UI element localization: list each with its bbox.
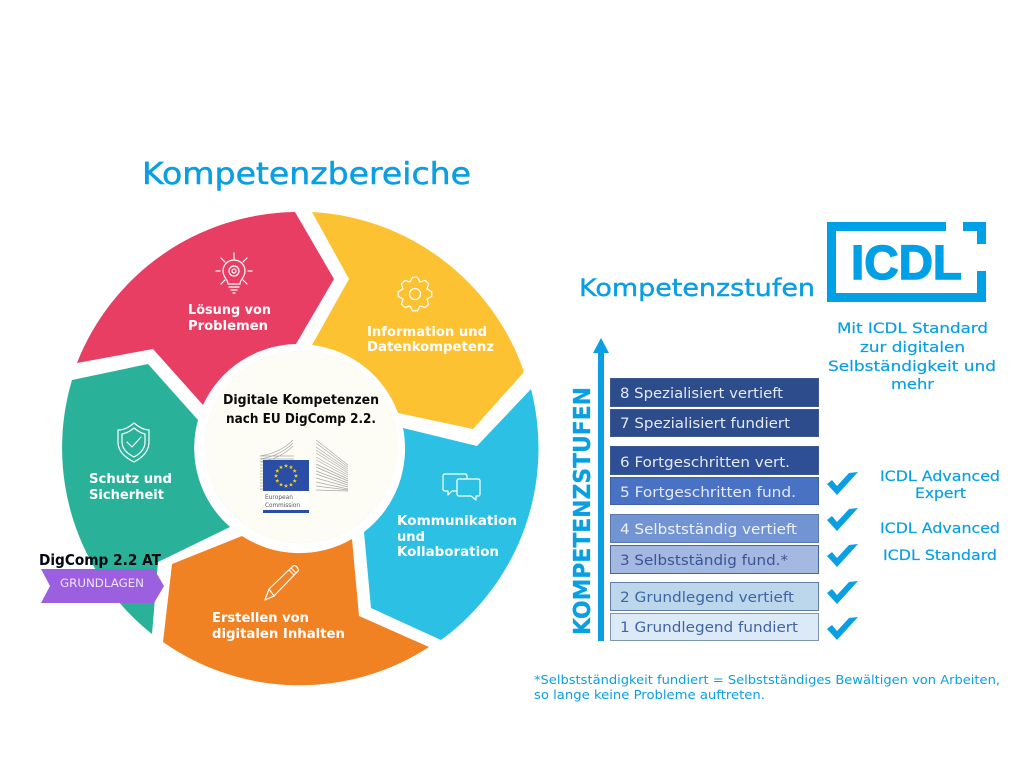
icon: speech bubbles	[443, 474, 480, 500]
badge: DigComp 2.2 AT Grundlagen: DigComp 2.2 AT	[39, 551, 161, 569]
ICDL logo: ICDL	[851, 237, 962, 290]
segment: Information und Datenkompetenz	[312, 212, 524, 429]
labels: ICDL certificates: Expert	[915, 486, 966, 502]
text: ICDL Standard note: mehr	[891, 377, 934, 393]
label: Erstellen von	[212, 611, 309, 626]
bar 6	[610, 446, 818, 474]
label: Lösung von	[188, 303, 271, 318]
bar 5	[610, 478, 818, 504]
label: und	[397, 530, 425, 545]
European Commission logo	[260, 440, 348, 513]
labels: ICDL certificates: ICDL Advanced	[880, 521, 1000, 537]
bar 7: 7 Spezialisiert fundiert	[620, 416, 790, 432]
European Commission logo: European	[265, 494, 293, 501]
label: Sicherheit	[89, 488, 164, 503]
footnote	[534, 673, 1000, 702]
segment: Lösung von Problemen	[77, 212, 334, 405]
heading: Kompetenzstufen: Kompetenzstufen	[579, 274, 815, 302]
label	[212, 611, 345, 642]
center heading	[223, 392, 379, 427]
icon: gear	[398, 277, 432, 311]
center heading: Digitale Kompetenzen	[223, 392, 379, 408]
label: Kollaboration	[397, 545, 499, 560]
wheel diagram	[62, 212, 538, 685]
footnote: *Selbstständigkeit fundiert = Selbstständiges Bewältigen von Arbeiten,	[534, 673, 1000, 687]
bar 8: 8 Spezialisiert vertieft	[620, 386, 783, 402]
label: Schutz und	[89, 472, 172, 487]
label	[89, 472, 172, 503]
text: ICDL Standard note: Mit ICDL Standard	[837, 321, 988, 337]
labels: ICDL certificates: ICDL Advanced	[880, 469, 1000, 485]
label: digitalen Inhalten	[212, 627, 345, 642]
bar 8	[610, 378, 818, 406]
label	[367, 325, 494, 355]
icon: pencil	[265, 566, 298, 600]
labels: ICDL certificates: ICDL Standard	[883, 548, 997, 564]
text: ICDL Standard note: Selbständigkeit und	[828, 359, 996, 375]
icon: shield with check	[118, 423, 149, 462]
bar 4: 4 Selbstständig vertieft	[620, 522, 797, 538]
bar 3	[610, 546, 818, 574]
bar 2: 2 Grundlegend vertieft	[620, 590, 794, 606]
labels: ICDL certificates	[880, 469, 1000, 564]
bar 7	[610, 410, 818, 436]
bar 4	[610, 514, 818, 542]
bar 1	[610, 614, 818, 640]
level bars	[610, 378, 818, 640]
center circle	[205, 351, 397, 543]
text: ICDL Standard note	[828, 321, 996, 393]
bar 3: 3 Selbstständig fund.*	[620, 553, 788, 569]
arrow: upward scale	[593, 338, 609, 641]
badge: DigComp 2.2 AT Grundlagen	[39, 551, 164, 603]
bar 2	[610, 582, 818, 610]
label	[397, 514, 517, 560]
ICDL logo	[827, 222, 986, 302]
segment: Erstellen von digitalen Inhalten	[163, 536, 429, 685]
center heading: nach EU DigComp 2.2.	[226, 411, 376, 427]
bar 1: 1 Grundlegend fundiert	[620, 620, 798, 636]
label: Datenkompetenz	[367, 340, 494, 355]
bar 6: 6 Fortgeschritten vert.	[620, 455, 790, 471]
title: Kompetenzbereiche: Kompetenzbereiche	[142, 157, 471, 192]
footnote: so lange keine Probleme auftreten.	[534, 688, 765, 702]
label	[188, 303, 271, 334]
label: Kommunikation	[397, 514, 517, 529]
bar 5: 5 Fortgeschritten fund.	[620, 485, 796, 501]
European Commission logo: Commission	[265, 502, 300, 509]
label: Problemen	[188, 319, 268, 334]
axis label: KOMPETENZSTUFEN: KOMPETENZSTUFEN	[570, 387, 596, 635]
check marks	[827, 472, 858, 640]
label: Information und	[367, 325, 487, 340]
segment: Schutz und Sicherheit	[62, 364, 230, 634]
segment: Kommunikation und Kollaboration	[364, 389, 538, 640]
icon: light bulb with gear	[216, 253, 252, 293]
text: ICDL Standard note: zur digitalen	[860, 340, 965, 356]
badge: DigComp 2.2 AT Grundlagen: GRUNDLAGEN	[60, 576, 144, 590]
